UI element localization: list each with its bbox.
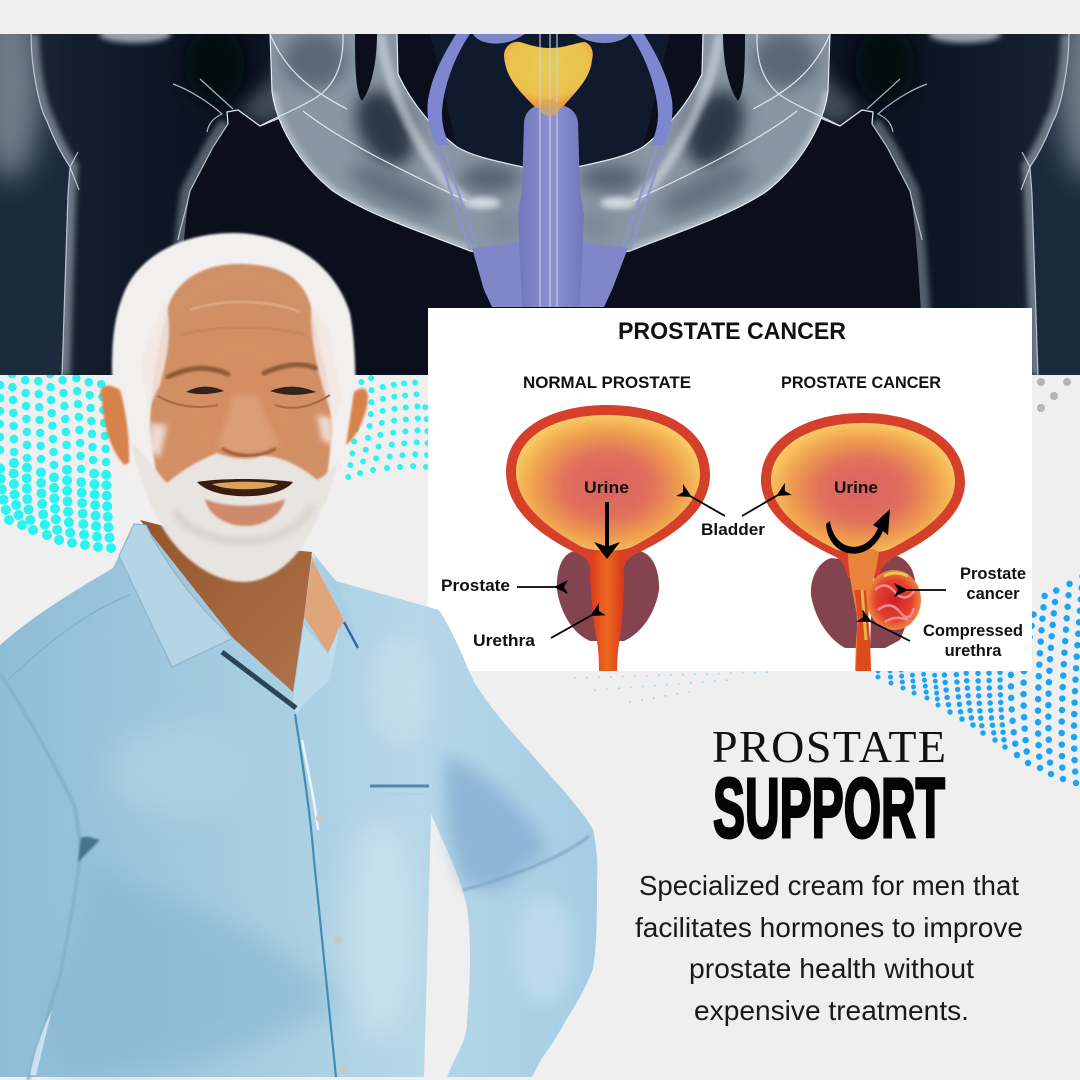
anatomy photo: translucent pelvis	[0, 0, 1080, 375]
diagram: bladder with prostate cancer	[761, 413, 1026, 671]
label: urine: Urine	[834, 479, 878, 497]
label: prostate cancer: cancer	[966, 585, 1020, 603]
text block: description: prostate health without	[689, 953, 974, 984]
arrow: urine flow down	[594, 502, 620, 559]
text block: description: Specialized cream for men that	[639, 870, 1019, 901]
head	[100, 233, 368, 582]
subheading: normal prostate: NORMAL PROSTATE	[523, 373, 691, 392]
heading: panel title: PROSTATE CANCER	[618, 318, 846, 345]
arrow: to prostate	[517, 586, 556, 588]
label: compressed urethra: urethra	[945, 642, 1002, 660]
beard	[130, 440, 338, 582]
label: bladder: Bladder	[701, 521, 766, 539]
ears	[100, 386, 129, 465]
label: prostate cancer: Prostate	[960, 565, 1026, 583]
hair	[112, 233, 356, 480]
neck	[140, 520, 312, 692]
label: urethra: Urethra	[473, 632, 536, 650]
icon: purple urethra and penile base	[472, 34, 630, 307]
decorative cyan halftone dots, left	[0, 372, 428, 548]
shirt shading and folds	[0, 595, 589, 1080]
face	[150, 264, 332, 500]
mouth	[197, 479, 293, 496]
decorative grey dots, upper right	[1037, 378, 1071, 412]
label: compressed urethra: Compressed	[923, 622, 1023, 640]
text block: description: expensive treatments.	[694, 995, 969, 1026]
decorative blue halftone dots, lower right	[575, 572, 1080, 783]
shirt	[0, 524, 597, 1077]
icon: yellow prostate gland	[504, 42, 593, 108]
arrow: to tumour	[906, 589, 946, 591]
heading: PROSTATE: PROSTATE	[712, 721, 946, 772]
placket and buttons	[222, 652, 429, 1077]
label: prostate: Prostate	[441, 577, 510, 595]
arrow: curved backflow	[826, 509, 890, 554]
diagram: normal bladder and prostate	[441, 405, 710, 671]
eyebrows and eyes	[168, 365, 315, 377]
collar	[119, 524, 358, 716]
nose	[218, 395, 278, 455]
arrow: to urethra	[551, 615, 592, 638]
subheading: prostate cancer: PROSTATE CANCER	[781, 373, 941, 392]
arrow: to left bladder	[690, 496, 725, 516]
photo: smiling older man in blue shirt	[0, 233, 597, 1080]
text block: description	[635, 870, 1023, 1026]
label: urine: Urine	[584, 479, 629, 497]
arrow: to right bladder	[742, 495, 778, 516]
icon: tumour	[867, 570, 921, 630]
panel: prostate cancer diagram	[428, 308, 1032, 671]
text block: description: facilitates hormones to improve	[635, 912, 1023, 943]
arrow: to compressed urethra	[870, 621, 910, 641]
